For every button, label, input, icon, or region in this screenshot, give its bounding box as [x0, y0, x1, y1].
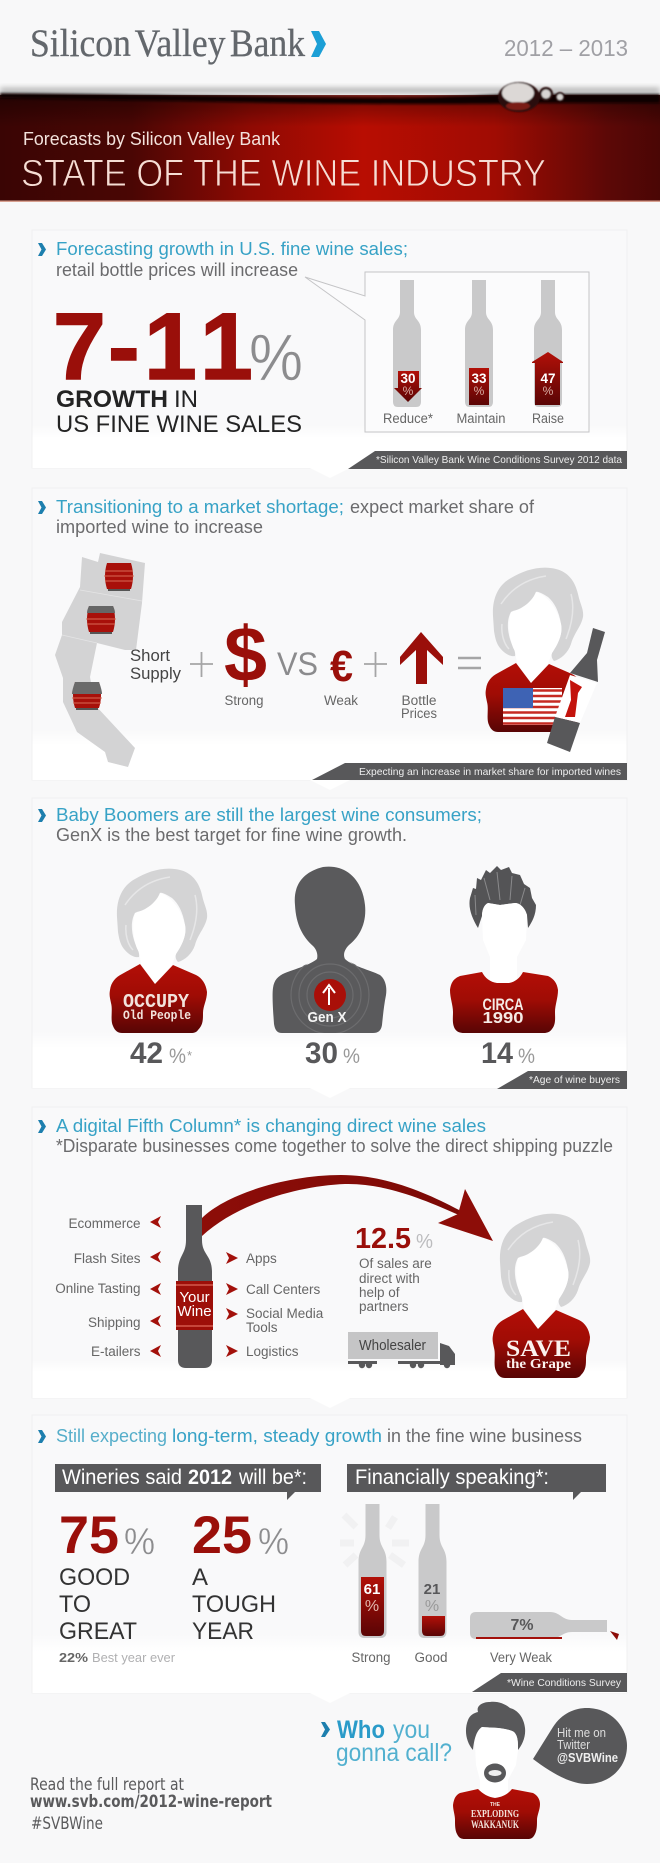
- figure: woman with save the grape shirt: SAVE: [506, 1336, 571, 1361]
- left channel labels: Online Tasting: [55, 1281, 140, 1296]
- bottle: your wine: Wine: [177, 1303, 212, 1320]
- stat 14%: 14: [481, 1037, 513, 1070]
- speech bubble: twitter: Twitter: [557, 1737, 591, 1752]
- footnote ribbon: *Silicon Valley Bank Wine Conditions Survey 2012 data: [376, 454, 622, 466]
- panel: fine wine sales growth: [32, 230, 627, 478]
- arrow: bottle to consumer: [202, 1175, 493, 1241]
- bottle: your wine: [176, 1205, 213, 1368]
- right channel labels: Apps: [246, 1251, 277, 1266]
- stat caption: [359, 1256, 432, 1314]
- right channel labels: Social Media: [246, 1306, 324, 1321]
- heading: expect market share of: [350, 497, 535, 517]
- heading: Still expecting: [56, 1426, 167, 1446]
- footnote ribbon: [312, 763, 627, 780]
- figure: woman with save the grape shirt: [493, 1214, 590, 1378]
- bottle: very weak 7%: 7%: [510, 1617, 534, 1634]
- who you gonna call: [321, 1716, 452, 1767]
- plus sign: [190, 652, 213, 677]
- stat 30%: %: [343, 1045, 360, 1068]
- figure: gen X: Gen X: [308, 1009, 346, 1026]
- stat 25% a tough year: [192, 1506, 289, 1645]
- stat 75% good to great: GOOD: [59, 1564, 130, 1591]
- bottle: strong 61%: [352, 1504, 390, 1665]
- stat 25% a tough year: %: [258, 1521, 289, 1563]
- footnote ribbon: [472, 1673, 627, 1692]
- panel: age groups: [32, 798, 627, 1098]
- title banner: [0, 82, 660, 202]
- who you gonna call: Who: [337, 1716, 385, 1744]
- panel: market shortage: [32, 488, 627, 790]
- heading: A digital Fifth Column* is changing direct wine sales: [56, 1116, 486, 1136]
- icon: bottle prices up arrow: Bottle: [402, 693, 436, 708]
- stat 12.5%: 12.5: [355, 1223, 411, 1255]
- heading: [38, 1116, 613, 1156]
- icon: weak euro: Weak: [324, 693, 358, 708]
- footnote ribbon: *Age of wine buyers: [529, 1074, 620, 1086]
- icon: up arrow badge: [314, 979, 346, 1011]
- bottle: maintain 33%: 33: [471, 371, 487, 386]
- stat caption: help of: [359, 1285, 400, 1300]
- footnote ribbon: *Wine Conditions Survey: [507, 1677, 622, 1689]
- figure: woman with American flag and bottle: [486, 568, 605, 752]
- left channel labels: Flash Sites: [74, 1251, 141, 1266]
- figure: gen X: [273, 867, 386, 1034]
- stat caption: Of sales are: [359, 1256, 432, 1271]
- figure: woman with save the grape shirt: the Grape: [506, 1357, 571, 1372]
- icon: strong dollar: $: [224, 610, 267, 698]
- bottle: good 21%: 21: [424, 1581, 440, 1598]
- figure: baby boomer: [110, 869, 207, 1033]
- bottle: reduce 30%: [383, 280, 434, 426]
- header box: wineries said: will be*:: [238, 1466, 307, 1489]
- starburst behind bottle: [340, 1515, 409, 1565]
- report link text: [30, 1775, 272, 1834]
- icon: strong dollar: Strong: [224, 693, 264, 708]
- bottle: reduce 30%: Reduce*: [383, 411, 434, 426]
- bottle: strong 61%: Strong: [352, 1650, 390, 1665]
- bottle: reduce 30%: 30: [400, 371, 416, 386]
- heading: [38, 805, 482, 845]
- stat caption: direct with: [359, 1271, 420, 1286]
- stat caption: IN: [174, 386, 198, 413]
- note: 22% best year ever: 22%: [59, 1650, 88, 1665]
- heading: long-term, steady growth: [172, 1426, 382, 1446]
- heading: Baby Boomers are still the largest wine consumers;: [56, 805, 482, 825]
- stat 42%: [130, 1037, 192, 1070]
- equation: short supply: [130, 646, 181, 683]
- left channel labels: E-tailers: [91, 1344, 141, 1359]
- wine bubbles: [498, 82, 565, 112]
- footnote ribbon: [497, 1071, 627, 1089]
- equals sign: [458, 658, 481, 668]
- bottle: reduce 30%: %: [403, 384, 414, 398]
- stat 25% a tough year: TOUGH: [192, 1591, 276, 1618]
- banner subtitle: Forecasts by Silicon Valley Bank: [23, 129, 281, 149]
- icon: wine bottle: [547, 628, 605, 752]
- bottle: very weak 7%: [470, 1612, 619, 1665]
- figure: baby boomer: Old People: [123, 1008, 191, 1023]
- stat 75% good to great: %: [124, 1521, 155, 1563]
- figure: baby boomer: OCCUPY: [123, 991, 190, 1013]
- bottle: maintain 33%: %: [474, 384, 485, 398]
- bottle: strong 61%: 61: [364, 1581, 380, 1598]
- left channel labels: Shipping: [88, 1315, 140, 1330]
- callout: retail price survey: [305, 272, 589, 432]
- stat 75% good to great: 75: [59, 1506, 119, 1565]
- stat 14%: %: [518, 1045, 535, 1068]
- note: 22% best year ever: Best year ever: [92, 1650, 176, 1665]
- stat 25% a tough year: 25: [192, 1506, 252, 1565]
- stat 42%: %: [169, 1045, 186, 1068]
- stat caption: GROWTH: [56, 386, 168, 413]
- icon: wholesaler truck: Wholesaler: [359, 1337, 426, 1354]
- icon: US flag: [503, 688, 562, 725]
- stat 75% good to great: TO: [59, 1591, 91, 1618]
- VS: VS: [277, 646, 318, 682]
- panel: digital fifth column: [32, 1107, 627, 1408]
- icon: bottle prices up arrow: Prices: [401, 706, 437, 721]
- stat 75% good to great: GREAT: [59, 1618, 137, 1645]
- stat 42%: *: [187, 1048, 192, 1063]
- figure: millennial: CIRCA: [482, 995, 524, 1014]
- report link text: www.svb.com/2012-wine-report: [30, 1792, 272, 1812]
- footnote ribbon: [348, 451, 627, 469]
- stat 42%: 42: [130, 1037, 163, 1070]
- right channel labels: Logistics: [246, 1344, 299, 1359]
- figure: millennial: 1990: [482, 1010, 524, 1027]
- icon: weak euro: €: [330, 642, 353, 691]
- icon: barrel Oregon: [86, 606, 116, 634]
- stat 25% a tough year: YEAR: [192, 1618, 254, 1645]
- bottle: your wine: Your: [179, 1289, 210, 1306]
- header box: wineries said: 2012: [188, 1466, 232, 1489]
- heading: [38, 1426, 582, 1446]
- heading: *Disparate businesses come together to solve the direct shipping puzzle: [56, 1136, 613, 1156]
- left channel labels: Ecommerce: [68, 1216, 140, 1231]
- heading: imported wine to increase: [56, 517, 263, 537]
- bottle: raise 47%: Raise: [532, 411, 564, 426]
- bottle: good 21%: [414, 1504, 448, 1665]
- right channel labels: [226, 1251, 324, 1359]
- bottle: raise 47%: %: [543, 384, 554, 398]
- stat 30%: 30: [305, 1037, 338, 1070]
- logo: Silicon Valley Bank: Silicon Valley Bank: [30, 22, 305, 65]
- figure: bearded man: THE: [490, 1802, 501, 1808]
- plus sign: [364, 652, 387, 677]
- right channel labels: Call Centers: [246, 1282, 321, 1297]
- heading: Transitioning to a market shortage;: [56, 497, 344, 517]
- bottle: strong 61%: %: [365, 1598, 379, 1615]
- icon: wholesaler truck: [348, 1332, 455, 1368]
- bottle: maintain 33%: [456, 280, 506, 426]
- header box: financially speaking: Financially speaking*:: [355, 1466, 549, 1489]
- stat caption: [56, 386, 302, 438]
- speech bubble: twitter: @SVBWine: [557, 1750, 618, 1765]
- figure: bearded man: EXPLODING: [471, 1809, 519, 1820]
- heading: [38, 239, 408, 280]
- stat 30%: [305, 1037, 360, 1070]
- heading: Forecasting growth in U.S. fine wine sales;: [56, 239, 408, 259]
- header box: financially speaking: [347, 1464, 606, 1500]
- report link text: Read the full report at: [30, 1775, 184, 1795]
- year range: 2012 – 2013: [504, 35, 628, 61]
- banner title: STATE OF THE WINE INDUSTRY: [21, 153, 546, 195]
- icon: barrel California: [72, 682, 102, 710]
- big stat 7-11%: 7-11: [53, 294, 253, 400]
- speech bubble: twitter: Hit me on: [557, 1725, 606, 1740]
- bottle: good 21%: %: [425, 1598, 439, 1615]
- speech bubble: twitter: [533, 1708, 627, 1784]
- big stat 7-11%: %: [249, 320, 303, 394]
- header box: wineries said: [55, 1464, 321, 1500]
- stat caption: US FINE WINE SALES: [56, 411, 302, 438]
- bottle: raise 47%: 47: [540, 371, 556, 386]
- heading: retail bottle prices will increase: [56, 260, 298, 280]
- left channel labels: [55, 1216, 161, 1359]
- heading: GenX is the best target for fine wine growth.: [56, 825, 407, 845]
- panel: long-term growth: [32, 1415, 627, 1703]
- icon: bottle prices up arrow: [400, 632, 443, 721]
- bottle: maintain 33%: Maintain: [456, 411, 506, 426]
- equation: short supply: Supply: [130, 664, 181, 683]
- who you gonna call: you: [393, 1716, 430, 1744]
- who you gonna call: gonna call?: [336, 1739, 452, 1767]
- stat 12.5%: %: [416, 1231, 433, 1253]
- bottle: raise 47%: [532, 280, 564, 426]
- header box: wineries said: Wineries said: [62, 1466, 182, 1489]
- stat 14%: [481, 1037, 535, 1070]
- icon: weak euro: [324, 642, 358, 708]
- figure: bearded man: WAKKANUK: [471, 1817, 519, 1831]
- report link text: #SVBWine: [31, 1814, 103, 1834]
- footer: [30, 1702, 627, 1839]
- heading: in the fine wine business: [387, 1426, 582, 1446]
- figure: bearded man: [453, 1702, 540, 1839]
- footnote ribbon: Expecting an increase in market share for imported wines: [359, 766, 621, 778]
- equation: short supply: Short: [130, 646, 170, 665]
- heading: [38, 497, 535, 537]
- stat 25% a tough year: A: [192, 1564, 208, 1591]
- map: west coast states with barrels: [55, 553, 145, 767]
- bottle: good 21%: Good: [414, 1650, 448, 1665]
- header: [30, 22, 628, 65]
- figure: millennial: [450, 866, 558, 1033]
- right channel labels: Tools: [246, 1320, 278, 1335]
- stat 75% good to great: [59, 1506, 155, 1645]
- stat caption: partners: [359, 1299, 409, 1314]
- icon: barrel Washington: [104, 563, 134, 591]
- bottle: very weak 7%: Very Weak: [490, 1650, 552, 1665]
